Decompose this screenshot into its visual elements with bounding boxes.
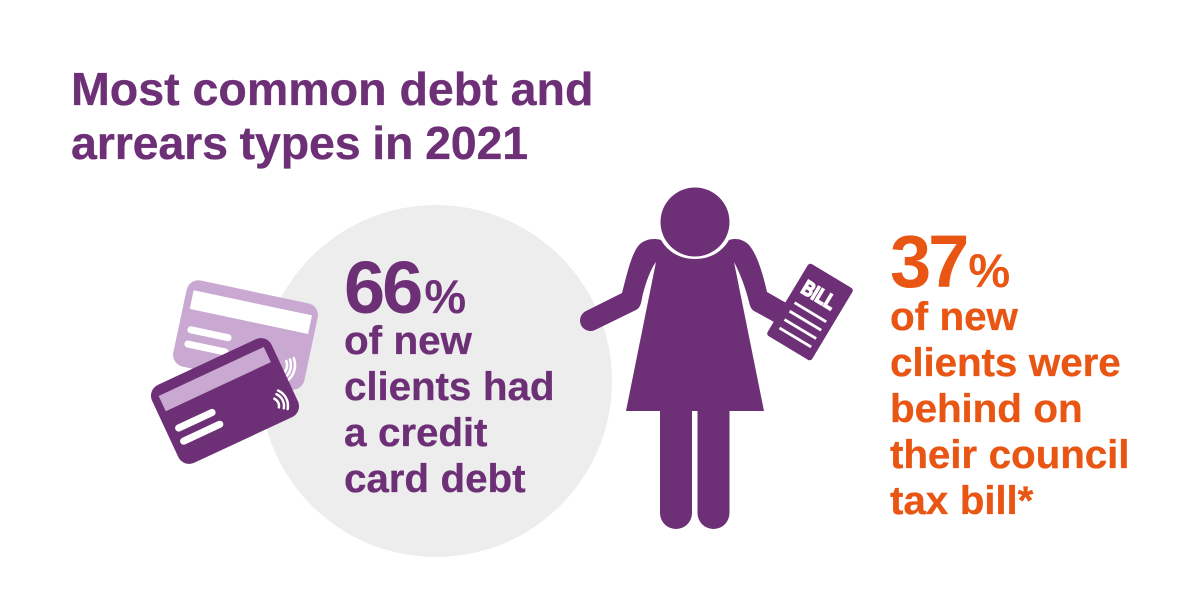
- caption: of new: [344, 319, 472, 363]
- stat: 37% council tax: [890, 220, 1129, 523]
- caption: clients had: [344, 365, 554, 409]
- caption: their council: [890, 433, 1129, 477]
- title: arrears types in 2021: [71, 117, 528, 169]
- title: [71, 63, 593, 169]
- icon: woman holding bill: BILL: [797, 276, 840, 315]
- caption: [890, 295, 1129, 523]
- title: Most common debt and: [71, 63, 593, 115]
- caption: [344, 319, 554, 501]
- figure 66%: 66%: [344, 246, 466, 329]
- stat: 66% credit card debt: [344, 246, 554, 501]
- caption: behind on: [890, 387, 1083, 431]
- caption: a credit: [344, 411, 487, 455]
- caption: clients were: [890, 341, 1121, 385]
- caption: of new: [890, 295, 1018, 339]
- caption: tax bill*: [890, 479, 1033, 523]
- figure 37%: 37%: [890, 220, 1010, 303]
- caption: card debt: [344, 457, 525, 501]
